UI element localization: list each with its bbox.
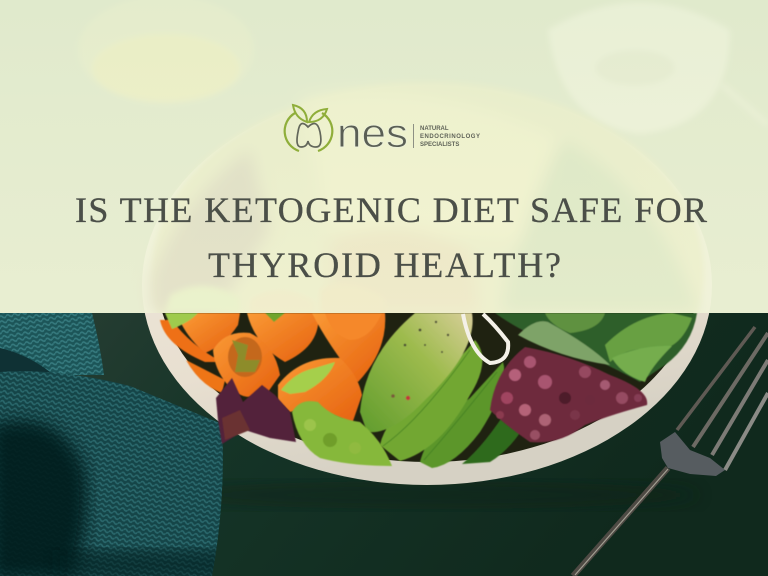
onion ring [463, 314, 508, 363]
main fold [0, 371, 223, 576]
title: IS THE KETOGENIC DIET SAFE FOR [75, 190, 707, 230]
photo: teal knit cloth [0, 313, 230, 576]
photo: glass of oil [78, 0, 254, 104]
logo tagline: ENDOCRINOLOGY [420, 134, 480, 140]
carrot rolls [160, 313, 385, 424]
purple and green garnish [216, 378, 392, 466]
upper food mass [148, 85, 702, 313]
logo divider [413, 124, 414, 148]
photo: salad bowl [142, 82, 712, 485]
roll A [182, 313, 240, 353]
fold shadow [0, 420, 87, 576]
logo [285, 105, 480, 156]
logo tagline: SPECIALISTS [420, 142, 459, 148]
avocado slices [360, 313, 525, 468]
green salad leaves [495, 313, 697, 382]
bowl interior [162, 313, 694, 462]
bowl body [142, 85, 712, 485]
photo: small white bowl [548, 2, 768, 134]
pale translucent banner [0, 0, 768, 313]
title: THYROID HEALTH? [208, 245, 561, 285]
roll C [312, 313, 385, 382]
logo wordmark: nes [337, 110, 408, 156]
roll D [213, 333, 280, 397]
upper fold [0, 313, 104, 375]
ribbons [160, 320, 222, 362]
roll B [247, 313, 318, 362]
photo: fork [573, 327, 768, 576]
logo tagline: NATURAL [420, 126, 449, 132]
logo icon: thyroid and leaves [285, 105, 332, 151]
red lettuce [490, 347, 647, 442]
roll E [278, 358, 362, 424]
